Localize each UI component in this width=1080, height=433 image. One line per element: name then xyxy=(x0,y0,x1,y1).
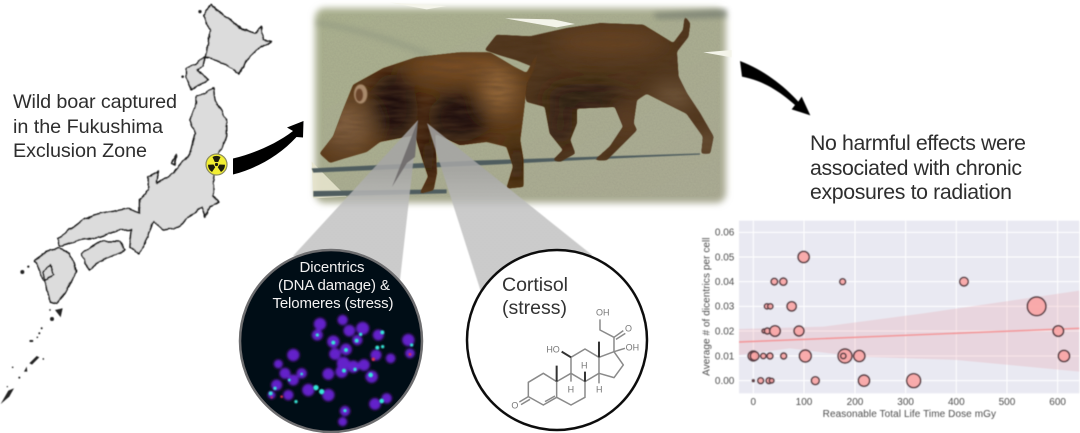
front boar ear xyxy=(354,84,367,104)
y axis tick labels: 0.06 xyxy=(715,228,735,239)
text: capture location: Exclusion Zone xyxy=(13,140,147,162)
x axis tick labels: 500 xyxy=(999,397,1016,408)
cortisol molecule structure: OH xyxy=(626,342,639,352)
data points xyxy=(748,251,1070,388)
map: small southern islands xyxy=(1,10,202,404)
y axis tick labels: 0.00 xyxy=(715,376,735,387)
cortisol molecule structure: OH xyxy=(596,308,609,318)
panel: cortisol circle xyxy=(467,250,647,430)
cortisol molecule structure: H xyxy=(568,385,574,395)
cortisol molecule structure xyxy=(511,308,639,411)
map: Japan islands xyxy=(35,5,272,303)
text: conclusion xyxy=(810,131,1026,204)
x axis tick labels xyxy=(751,397,1066,408)
chart: dicentrics versus dose xyxy=(701,221,1079,420)
x axis tick labels: 100 xyxy=(796,397,813,408)
x axis title: Reasonable Total Life Time Dose mGy xyxy=(823,409,996,420)
rear boar shading xyxy=(483,17,717,163)
panel: map of Japan xyxy=(1,5,272,404)
x axis tick labels: 400 xyxy=(948,397,965,408)
y axis tick labels: 0.04 xyxy=(715,277,735,288)
y axis title: Average # of dicentrics per cell xyxy=(701,237,712,376)
cortisol molecule structure: H xyxy=(581,360,587,370)
road shadows and markings xyxy=(312,3,732,198)
cortisol heading xyxy=(502,274,568,319)
road background xyxy=(315,8,726,203)
micrograph caption: Telomeres (stress) xyxy=(272,295,394,312)
micrograph caption xyxy=(272,259,394,312)
text: conclusion: exposures to radiation xyxy=(810,180,1012,204)
text: capture location: in the Fukushima xyxy=(13,116,163,138)
cortisol molecule structure: H xyxy=(596,385,602,395)
x axis tick labels: 600 xyxy=(1049,397,1066,408)
text: capture location: Wild boar captured xyxy=(13,91,177,113)
y axis tick labels xyxy=(715,228,735,387)
photo: wild boars on road xyxy=(312,3,732,203)
panel: dicentrics micrograph circle xyxy=(240,250,422,432)
arrow: boars to conclusion xyxy=(740,61,810,115)
text: conclusion: No harmful effects were xyxy=(810,131,1026,155)
micrograph caption: (DNA damage) & xyxy=(278,277,390,294)
text: conclusion: associated with chronic xyxy=(810,156,1022,180)
cortisol heading: Cortisol xyxy=(502,274,568,296)
front boar shading xyxy=(320,53,526,193)
confidence band xyxy=(739,291,1079,372)
road texture xyxy=(322,14,720,197)
front boar xyxy=(317,50,543,197)
micrograph chromosomes xyxy=(269,316,414,425)
text: capture location xyxy=(13,91,177,162)
cortisol heading: (stress) xyxy=(502,297,567,319)
x axis tick labels: 300 xyxy=(897,397,914,408)
y axis tick labels: 0.01 xyxy=(715,351,735,362)
cortisol molecule structure: HO xyxy=(546,344,560,354)
x axis tick labels: 0 xyxy=(751,397,757,408)
rear boar xyxy=(483,17,717,163)
y axis tick labels: 0.03 xyxy=(715,302,735,313)
icon: radiation symbol xyxy=(206,154,227,175)
regression line xyxy=(739,328,1079,342)
cortisol molecule structure: O xyxy=(511,401,518,411)
arrow: map to boars xyxy=(233,121,304,174)
cortisol molecule structure: O xyxy=(625,323,632,333)
x axis tick labels: 200 xyxy=(847,397,864,408)
micrograph caption: Dicentrics xyxy=(300,259,364,276)
y axis tick labels: 0.05 xyxy=(715,252,735,263)
y axis tick labels: 0.02 xyxy=(715,326,735,337)
callout beams: photo to circles xyxy=(293,120,592,292)
plot background xyxy=(739,221,1079,393)
